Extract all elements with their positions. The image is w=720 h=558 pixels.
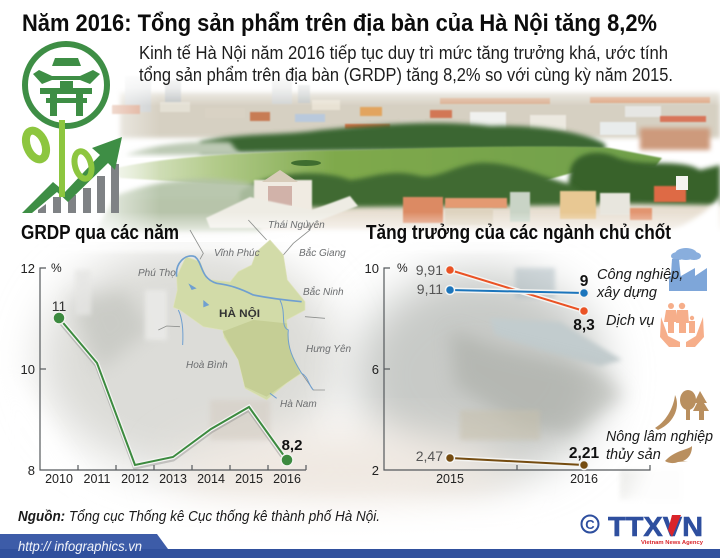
right chart axes — [384, 268, 650, 470]
series: industry blue — [446, 286, 588, 298]
footer bar — [0, 534, 720, 558]
left chart x labels: 2011 — [84, 472, 110, 486]
left chart unit: % — [51, 261, 62, 275]
map labels: provinces: Bắc Ninh — [303, 285, 344, 298]
intro text: Kinh tế Hà Nội năm 2016 tiếp tục duy trì mức tăng trưởng khá, ước tính — [139, 43, 668, 63]
left chart line — [59, 318, 287, 467]
right chart y labels — [365, 261, 379, 478]
left chart value labels: 11 — [52, 298, 66, 314]
left chart x labels: 2012 — [121, 472, 149, 486]
label: industry: Công nghiệp, — [597, 267, 683, 283]
left chart y labels — [21, 261, 35, 478]
right chart x labels — [436, 472, 598, 486]
label: agriculture: Nông lâm nghiệp — [606, 429, 713, 445]
left chart x labels: 2010 — [45, 472, 73, 486]
icon: family in hands — [660, 303, 704, 347]
background: top photo of Hoan Kiem lake and city — [0, 70, 720, 252]
heading: sectors chart: Tăng trưởng của các ngành chủ chốt — [366, 222, 671, 244]
series: agriculture brown — [446, 454, 588, 470]
left chart axes — [40, 268, 306, 470]
right chart 2015 values: 9,91 — [416, 262, 443, 278]
map labels: provinces: Vĩnh Phúc — [214, 248, 260, 259]
left chart x labels: 2014 — [197, 472, 225, 486]
map labels: provinces: Thái Nguyên — [268, 220, 325, 231]
map labels: provinces — [138, 220, 352, 410]
chart: GRDP line 2010-2016: 8,2 — [282, 437, 302, 454]
right chart 2016 values: 8,3 — [573, 317, 595, 334]
right chart x labels: 2016 — [570, 472, 598, 486]
map labels: provinces: Phú Thọ — [138, 268, 176, 279]
left chart data points — [53, 312, 293, 466]
right chart unit: % — [397, 261, 408, 275]
map labels: provinces: Hưng Yên — [306, 344, 352, 355]
icon: wheat and trees — [655, 390, 709, 430]
left chart x labels: 2016 — [273, 472, 301, 486]
map of Hanoi with neighbouring provinces — [138, 220, 352, 410]
left chart x labels: 2015 — [235, 472, 263, 486]
right chart 2015 values — [416, 262, 443, 464]
right chart 2015 values: 2,47 — [416, 448, 443, 464]
right chart x labels: 2015 — [436, 472, 464, 486]
series: services orange — [446, 266, 588, 316]
right chart y labels: 2 — [372, 463, 379, 478]
map labels: provinces: Hà Nam — [280, 399, 317, 410]
logo: TTXVN Vietnam News Agency: TTXVN — [608, 511, 703, 542]
intro text — [139, 43, 673, 85]
icon: fish — [665, 446, 692, 463]
label: industry: xây dựng — [596, 285, 657, 301]
map labels: provinces: Bắc Giang — [299, 246, 346, 259]
right chart 2016 values — [569, 273, 599, 462]
footer url: http:// infographics.vn — [18, 538, 142, 554]
right chart 2016 values: 2,21 — [569, 445, 599, 462]
chart: sector growth 2015-2016 — [365, 261, 650, 486]
map label: Hà Nội: HÀ NỘI — [219, 307, 260, 320]
source note: Nguồn: Tổng cục Thống kê Cục thống kê thành phố Hà Nội. — [18, 509, 380, 525]
map labels: provinces: Hoà Bình — [186, 360, 228, 371]
icon: Hanoi logo with percent and growth arrow — [16, 35, 122, 213]
label: industry — [596, 267, 683, 301]
left chart x labels: 2013 — [159, 472, 187, 486]
label: services: Dịch vụ — [606, 313, 654, 329]
right chart 2015 values: 9,11 — [417, 281, 443, 297]
icon: factory — [669, 248, 707, 291]
right chart y labels: 6 — [372, 362, 379, 377]
label: agriculture — [606, 429, 713, 463]
right chart 2016 values: 9 — [580, 273, 589, 290]
chart: GRDP line 2010-2016 — [21, 261, 306, 486]
left chart y labels: 12 — [21, 261, 35, 276]
logo: TTXVN Vietnam News Agency: Vietnam News Agency — [641, 540, 704, 546]
intro text: tổng sản phẩm trên địa bàn (GRDP) tăng 8,2% so với cùng kỳ năm 2015. — [139, 65, 673, 85]
label: agriculture: thủy sản — [606, 447, 661, 463]
left chart y labels: 8 — [28, 463, 35, 478]
right chart y labels: 10 — [365, 261, 379, 276]
left chart y labels: 10 — [21, 362, 35, 377]
left chart x labels — [45, 472, 301, 486]
title: Năm 2016: Tổng sản phẩm trên địa bàn của Hà Nội tăng 8,2% — [22, 10, 657, 37]
heading: GRDP chart: GRDP qua các năm — [21, 222, 179, 244]
logo: TTXVN Vietnam News Agency: C — [585, 517, 595, 532]
logo: TTXVN Vietnam News Agency — [582, 511, 704, 546]
